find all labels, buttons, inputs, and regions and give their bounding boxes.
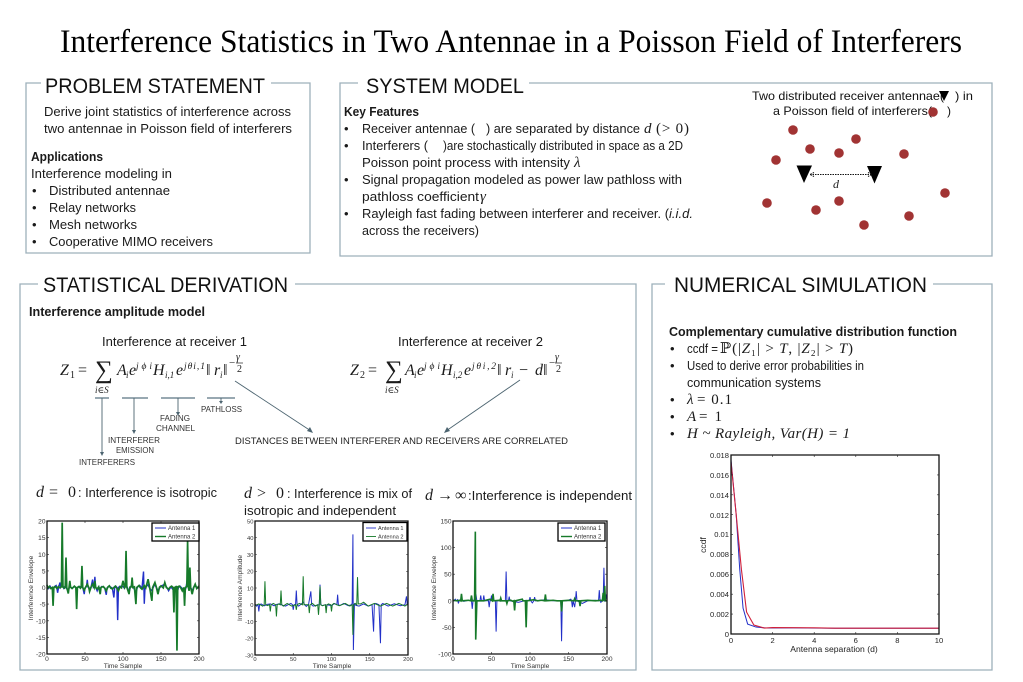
equation: Z2: d [535,362,544,379]
y tick labels: -100 [438,652,452,658]
series: antenna 1 and 2 [47,523,199,651]
equation: Z2: − [519,362,528,379]
ccdf description: Complementary cumulative distribution function [669,324,957,339]
legend: Antenna 2 [168,534,196,540]
x tick labels [253,657,413,663]
x tick labels: 200 [193,656,205,663]
equation: Z2: = [368,362,377,379]
x tick labels: 4 [812,636,816,645]
label: interferer emission: EMISSION [116,445,154,455]
key features list: (> 0) [656,121,689,137]
ccdf description: A [686,409,697,425]
y tick labels: -5 [40,602,46,609]
label: fading channel: FADING [160,413,190,423]
legend: Antenna 1 [168,526,196,532]
x tick labels [729,636,943,645]
equation: Z1: e [176,362,183,379]
equation: Z1 [60,352,243,395]
equation: Z2: − [549,357,555,369]
heading: statistical derivation: STATISTICAL DERIVATION [43,273,288,297]
key features list: d [644,121,652,137]
equation: Z2 [350,352,562,395]
y tick labels: 100 [440,545,452,552]
y tick labels: 10 [247,586,254,592]
caption: d > 0: 0 [276,485,284,502]
equation: Z2: 2 [556,364,561,375]
key features list: Receiver antennae ( [362,121,476,136]
caption: d = 0: d [36,484,45,501]
ccdf description: • [670,426,675,441]
caption: d > 0: isotropic and independent [244,503,396,518]
heading: numerical simulation: NUMERICAL SIMULATION [674,273,927,297]
y tick labels: 0 [725,630,729,639]
label: fading channel [156,413,195,433]
problem description: two antennae in Poisson field of interferers [44,121,293,136]
x tick labels [451,656,613,663]
ccdf description: ℙ(|Z₁| > T, |Z₂| > T) [720,341,853,357]
applications list: • [32,200,37,215]
equation: Z2: i,2 [453,370,463,380]
key features list: • [344,121,349,136]
equation: Z1: A [116,362,127,379]
x tick labels: 100 [117,656,129,663]
key features list: Rayleigh fast fading between interferer and receiver. ( [362,206,670,221]
term annotations [79,398,242,467]
key features list: Key Features [344,104,419,119]
ccdf description: communication systems [687,375,821,390]
equation: Z1: e [129,362,136,379]
ccdf description [669,324,957,442]
x tick labels: 50 [488,656,495,663]
x tick labels: 150 [563,656,574,663]
caption: d = 0: : Interference is isotropic [78,485,217,500]
x tick labels: 6 [854,636,858,645]
legend icon: antenna [939,91,949,101]
arrow: Z2 to distances [444,380,520,433]
diagram caption: ) in [955,89,973,103]
ccdf description: = 1 [699,409,722,425]
key features list: )are stochastically distributed in space as a 2D [443,138,683,153]
diagram caption: ) [947,104,951,118]
caption: d > 0: > [257,485,266,502]
applications list: • [32,217,37,232]
label: receiver 2: Interference at receiver 2 [398,334,543,349]
legend: Antenna 1 [378,526,404,532]
y tick labels: 0.014 [710,491,729,500]
y tick labels: 20 [247,570,254,576]
y tick labels: 40 [247,536,254,542]
arrow: pathloss [219,398,223,404]
equation: Z2: jϕi [422,362,440,372]
key features list: pathloss coefficient [362,189,479,204]
equation: Z2: jθi,2 [470,362,496,372]
axes [731,455,939,634]
panel: system model [340,74,992,256]
equation: Z1: − [229,357,235,369]
axes [453,521,607,654]
equation: Z1: H [152,362,166,379]
caption: d to infinity [425,487,632,504]
legend: Antenna 2 [574,534,602,540]
arrow: Z1 to distances [235,381,313,433]
diagram caption [752,89,973,118]
legend: Antenna 2 [378,534,404,540]
x tick labels: 10 [935,636,943,645]
equation: Z1: ∑ [95,357,113,384]
x tick labels: 150 [365,657,375,663]
interferer dots [762,107,950,230]
key features list: ) are separated by distance [486,121,640,136]
caption: d to infinity: d [425,487,434,504]
y tick labels [36,518,46,658]
y tick labels: 0.008 [710,550,729,559]
equation: Z2: H [440,362,454,379]
y tick labels: 0.004 [710,590,729,599]
x tick labels: 100 [524,656,536,663]
heading: problem statement: PROBLEM STATEMENT [45,74,265,98]
x tick labels: 50 [290,657,296,663]
legend: Antenna 1 [574,526,602,532]
key features list: across the receivers) [362,223,479,238]
ccdf description: = 0.1 [697,392,732,408]
y tick labels: -20 [36,652,46,658]
series: antenna 1 and 2 [255,534,408,650]
equation: Z1: Z [60,362,70,379]
equation: Z1: 2 [237,364,242,375]
x tick labels: 150 [155,656,167,663]
problem description: Derive joint statistics of interference across [44,104,291,119]
legend [152,523,199,541]
x tick labels: 0 [729,636,733,645]
label: pathloss: PATHLOSS [201,404,242,414]
equation: Z2: i [511,370,514,380]
equation: Z2: γ [555,352,560,363]
key features list: Poisson point process with intensity [362,155,571,170]
y tick labels: 0 [448,598,452,605]
equation: Z1: i,1 [165,370,174,380]
x axis label: Antenna separation (d) [790,644,878,654]
x tick labels: 0 [451,656,455,663]
y tick labels: 5 [42,568,46,575]
y tick labels: 0 [42,585,46,592]
key features list: γ [480,189,487,205]
panel: statistical derivation [20,273,636,670]
equation: Z2: r [505,362,512,379]
equation: Z1: r [214,362,221,379]
equation: Z2: ‖ [497,362,502,379]
applications list: Interference modeling in [31,166,172,181]
equation: Z2: Z [350,362,360,379]
y tick labels: 30 [247,553,254,559]
panel: problem statement [26,74,310,253]
ccdf description: • [670,392,675,407]
y tick labels [245,520,254,660]
series: antenna 1 and 2 [453,532,607,641]
heading: system model: SYSTEM MODEL [366,74,524,98]
equation: Z1: ‖ [206,362,210,379]
y tick labels: 0.01 [714,530,729,539]
x axis label: Time Sample [104,663,143,670]
caption: d > 0: d [244,485,253,502]
y tick labels: 0.016 [710,471,729,480]
note: correlated distances: DISTANCES BETWEEN INTERFERER AND RECEIVERS ARE CORRELATED [235,436,568,447]
equation: Z1: jθi,1 [182,362,205,372]
ccdf description: ccdf = [687,341,718,356]
caption: d = 0: 0 [68,484,76,501]
y tick labels: 15 [38,535,46,542]
y tick labels: 50 [247,520,254,526]
y tick labels: 20 [38,518,46,526]
key features list: • [344,206,349,221]
applications list: Mesh networks [49,217,138,232]
distance arrow [810,172,872,176]
y tick labels: 10 [38,552,46,559]
y axis label: Interference Amplitude [237,555,244,621]
key features list [344,104,693,238]
problem description [44,104,293,136]
diagram caption: Two distributed receiver antennae( [752,89,944,103]
equation: Z1: 1 [70,370,75,381]
equation: Z1: = [78,362,87,379]
ccdf description: • [670,409,675,424]
y tick labels [438,518,452,658]
y tick labels: 0.006 [710,570,729,579]
equation: Z1: i [126,370,129,380]
x tick labels: 0 [45,656,49,663]
x tick labels: 2 [770,636,775,645]
y axis label: Interference Envelope [431,555,438,620]
applications list: Applications [31,149,103,164]
y tick labels: 150 [440,518,452,526]
equation: Z2: i [414,370,417,380]
equation: Z2: A [404,362,415,379]
caption: d = 0 [36,484,217,501]
y tick labels: 0 [250,603,254,609]
equation: Z2: ∑ [385,357,403,384]
applications list: • [32,183,37,198]
equation: Z1: γ [236,352,241,363]
applications list: Cooperative MIMO receivers [49,234,213,249]
antenna right [867,166,882,184]
subheading: amplitude model: Interference amplitude model [29,304,205,319]
x tick labels: 100 [327,657,336,663]
chart: d = 0 [28,518,205,670]
x tick labels: 200 [601,656,613,663]
caption: d = 0: = [49,484,58,501]
y tick labels: -10 [36,618,46,625]
system diagram [752,89,973,230]
y tick labels: 0.012 [710,511,729,520]
x tick labels: 8 [895,636,900,645]
y tick labels: -15 [36,635,46,642]
y tick labels: -20 [245,636,254,642]
equation: Z1: i [220,370,223,380]
ccdf curves [731,460,939,628]
y tick labels [710,451,729,639]
key features list: Interferers ( [362,138,429,153]
y axis label: Interference Envelope [28,555,35,620]
legend [558,523,605,541]
y tick labels: 0.002 [710,610,729,619]
ccdf description: λ [686,392,694,408]
y tick labels: -10 [245,620,254,626]
diagram caption: a Poisson field of interferers( [773,104,932,118]
applications list: Relay networks [49,200,136,215]
x tick labels: 0 [253,657,257,663]
key features list: • [344,172,349,187]
x tick labels: 50 [81,656,89,663]
x tick labels: 200 [403,657,413,663]
x tick labels [45,656,205,663]
arrow: emission [132,398,136,434]
x axis label: Time Sample [511,663,550,670]
ccdf description: • [670,358,675,373]
equation: Z2: e [464,362,471,379]
label: interferers: INTERFERERS [79,457,135,467]
arrow: fading [176,398,180,416]
equation: Z1: ‖ [223,362,228,379]
key features list: i.i.d. [669,206,693,221]
key features list: • [344,138,349,153]
label: interferer emission: INTERFERER [108,435,160,445]
y tick labels: -30 [245,654,254,660]
y tick labels: -50 [442,625,452,632]
key features list: Signal propagation modeled as power law pathloss with [362,172,682,187]
equation: Z2: 2 [360,370,365,381]
caption: d to infinity: :Interference is independent [468,488,632,503]
caption: d > 0 [244,485,412,518]
y tick labels: 50 [444,572,452,579]
caption: d > 0: : Interference is mix of [287,486,412,501]
caption: d to infinity: → [437,487,453,504]
chart: ccdf vs antenna separation [698,451,943,654]
key features list: λ [573,155,581,171]
equation: Z2: i∈S [385,385,399,395]
equation: Z2: e [417,362,424,379]
legend [363,522,407,541]
axes [255,521,408,655]
y axis label: ccdf [698,537,708,553]
label: receiver 1: Interference at receiver 1 [102,334,247,349]
applications list: • [32,234,37,249]
y tick labels: 0.018 [710,451,729,460]
ccdf description: H ~ Rayleigh, Var(H) = 1 [686,426,850,442]
chart: d to infinity [431,518,613,670]
arrow: interferers [100,398,104,456]
axes [47,521,199,654]
ccdf description: • [670,341,675,356]
equation: Z1: jϕi [134,362,152,372]
label: interferer emission [108,435,160,455]
label: fading channel: CHANNEL [156,423,195,433]
applications list: Distributed antennae [49,183,170,198]
equation: Z1: i∈S [95,385,109,395]
antenna left [796,166,812,183]
equation: Z2: ‖ [543,362,548,379]
caption: d to infinity: ∞ [455,487,466,504]
chart: d > 0 [237,520,413,670]
panel: numerical simulation [652,273,992,670]
applications list [31,149,213,249]
x axis label: Time Sample [313,663,352,670]
distance label: d [833,177,840,191]
title: Interference Statistics in Two Antennae in a Poisson Field of Interferers [60,24,962,60]
ccdf description: Used to derive error probabilities in [687,358,864,373]
